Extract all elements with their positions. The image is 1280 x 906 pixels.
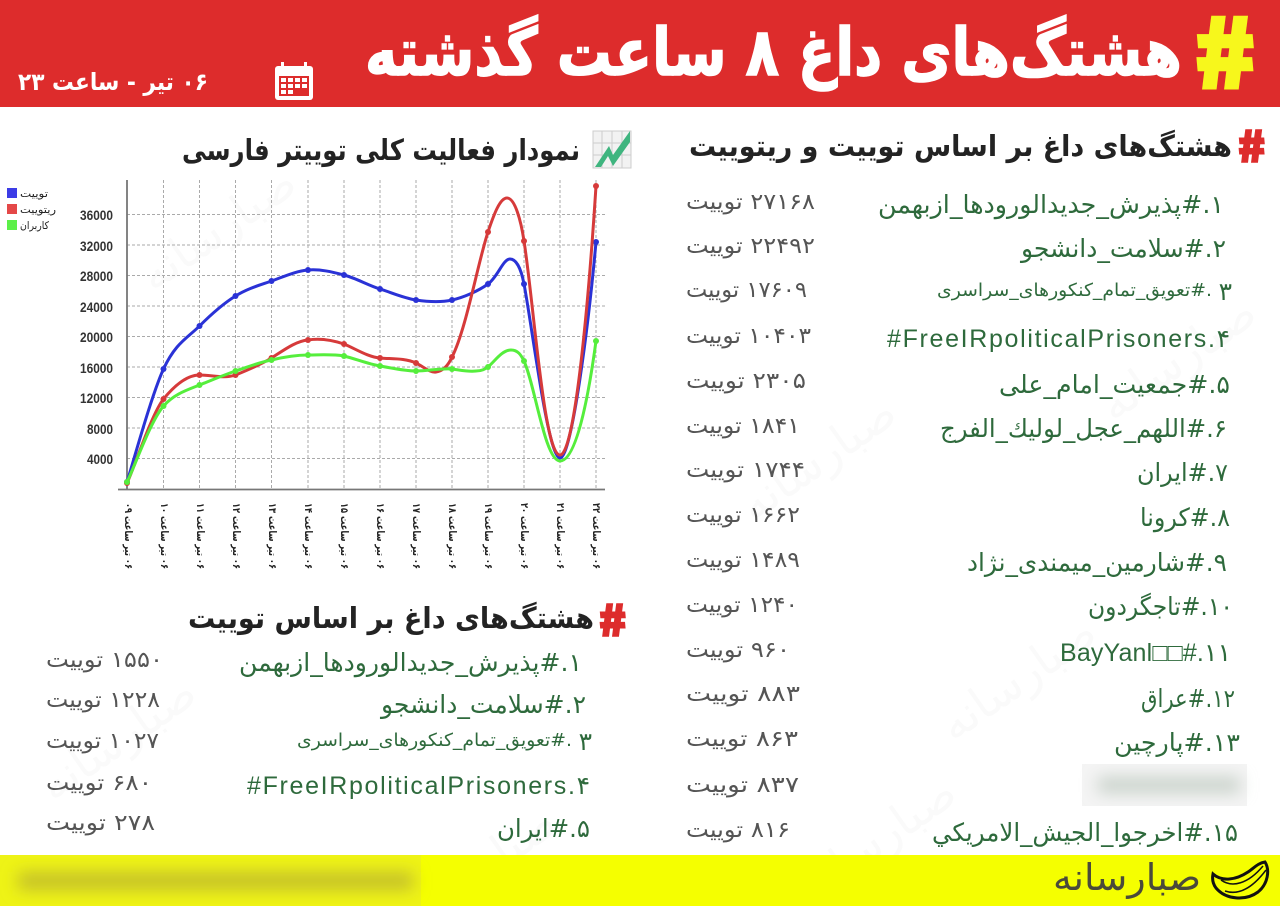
x axis labels: ۰۶ تیر ساعت ۱۷ — [410, 503, 422, 569]
heading: tweet and retweet: هشتگ‌های داغ بر اساس توییت و ریتوییت — [689, 129, 1232, 163]
y axis labels: 36000 — [80, 207, 113, 223]
row 11 hashtag: BayYanl□□#.۱۱ — [1060, 639, 1231, 667]
row 14 count: ۸۳۷ توییت — [686, 773, 799, 798]
row 4 count: ۶۸۰ توییت — [46, 771, 152, 796]
row 1 hashtag: ۱.#پذیرش_جدیدالورودها_ازبهمن — [239, 648, 582, 678]
legend: کاربران — [20, 220, 49, 232]
series: users (green) — [124, 338, 599, 485]
row 1 count: ۱۵۵۰ توییت — [46, 648, 163, 673]
y axis labels: 4000 — [87, 451, 113, 467]
y axis labels: 16000 — [80, 360, 113, 376]
icon: chart trend — [593, 131, 631, 168]
watermark background: صبارسانه — [29, 665, 206, 812]
x axis labels: ۰۶ تیر ساعت ۱۰ — [158, 503, 170, 569]
row 1 hashtag: ۱.#پذیرش_جدیدالورودها_ازبهمن — [878, 190, 1224, 220]
y axis labels: 24000 — [80, 299, 113, 315]
header banner — [0, 0, 1280, 107]
heading: activity chart: نمودار فعالیت کلی توییتر فارسی — [182, 133, 580, 167]
date and time: ۰۶ تیر - ساعت ۲۳ — [18, 68, 208, 96]
x axis labels: ۰۶ تیر ساعت ۲۰ — [518, 503, 530, 569]
watermark background: صبارسانه — [729, 385, 906, 532]
row 14 blurred hashtag — [1082, 764, 1247, 806]
row 1 count: ۲۷۱۶۸ توییت — [686, 190, 815, 215]
row 12 hashtag: ۱۲.#عراق — [1141, 684, 1235, 713]
y axis labels: 12000 — [80, 390, 113, 406]
row 3 count: ۱۷۶۰۹ توییت — [686, 278, 807, 303]
watermark background: صبارسانه — [929, 605, 1106, 752]
row 13 count: ۸۶۳ توییت — [686, 727, 798, 752]
legend — [7, 188, 56, 232]
row 2 count: ۱۲۲۸ توییت — [46, 688, 160, 713]
line chart — [7, 180, 605, 569]
watermark background: صبارسانه — [1089, 285, 1266, 432]
x axis labels: ۰۶ تیر ساعت ۱۸ — [446, 503, 458, 569]
row 2 hashtag: ۲.#سلامت_دانشجو — [1019, 234, 1226, 263]
panel: tweets ranking — [46, 596, 627, 843]
brand name: صبارسانه — [1053, 856, 1201, 899]
row 6 count: ۱۸۴۱ توییت — [686, 414, 800, 439]
x axis labels — [122, 503, 602, 569]
row 2 hashtag: ۲.#سلامت_دانشجو — [379, 690, 586, 719]
row 8 count: ۱۶۶۲ توییت — [686, 503, 800, 528]
row 3 count: ۱۰۲۷ توییت — [46, 729, 159, 754]
row 9 hashtag: ۹.#شارمین_میمندی_نژاد — [967, 548, 1227, 577]
row 5 count: ۲۳۰۵ توییت — [686, 369, 806, 394]
row 4 hashtag: #FreeIRpoliticalPrisoners.۴ — [887, 325, 1230, 353]
row 3 hashtag: ۳ — [579, 727, 592, 756]
icon: calendar — [275, 62, 313, 100]
x axis labels: ۰۶ تیر ساعت ۱۱ — [194, 503, 206, 569]
row 6 hashtag: ۶.#اللهم_عجل_لولیك_الفرج — [940, 414, 1227, 444]
y axis labels: 20000 — [80, 329, 113, 345]
x axis labels: ۰۶ تیر ساعت ۱۹ — [482, 503, 494, 569]
row 11 count: ۹۶۰ توییت — [686, 638, 790, 663]
row 3 hashtag: .#تعویق_تمام_کنکورهای_سراسری — [937, 280, 1212, 301]
y axis labels: 8000 — [87, 421, 113, 437]
row 4 hashtag: #FreeIRpoliticalPrisoners.۴ — [247, 772, 590, 800]
legend: توییت — [20, 188, 48, 200]
row 13 hashtag: ۱۳.#پارچین — [1114, 728, 1240, 757]
x axis labels: ۰۶ تیر ساعت ۲۲ — [590, 503, 602, 569]
row 3 hashtag: .#تعویق_تمام_کنکورهای_سراسری — [297, 730, 572, 751]
series: retweets (red) — [124, 183, 599, 486]
y axis labels: 32000 — [80, 238, 113, 254]
row 7 hashtag: ۷.#ایران — [1137, 458, 1228, 487]
watermark background: صبارسانه — [129, 155, 306, 302]
x axis labels: ۰۶ تیر ساعت ۰۹ — [122, 503, 134, 569]
x axis labels: ۰۶ تیر ساعت ۱۴ — [302, 503, 314, 569]
row 7 count: ۱۷۴۴ توییت — [686, 458, 805, 483]
heading icon: hash: # — [598, 596, 627, 645]
row 2 count: ۲۲۴۹۲ توییت — [686, 234, 815, 259]
series: tweets (blue) — [124, 239, 599, 485]
row 15 hashtag: ۱۵.#اخرجوا_الجیش_الامریكي — [932, 818, 1238, 847]
row 10 count: ۱۲۴۰ توییت — [686, 593, 798, 618]
row 5 hashtag: ۵.#ایران — [497, 814, 590, 843]
row 5 hashtag: ۵.#جمعیت_امام_علی — [999, 370, 1230, 399]
header hash icon: # — [1193, 0, 1257, 107]
panel: tweets and retweets ranking — [686, 122, 1266, 847]
row 3 hashtag — [937, 277, 1232, 306]
row 3 hashtag: ۳ — [1219, 277, 1232, 306]
x axis labels: ۰۶ تیر ساعت ۱۵ — [338, 503, 350, 569]
row 4 count: ۱۰۴۰۳ توییت — [686, 324, 811, 349]
footer bar — [0, 855, 1280, 906]
row 5 count: ۲۷۸ توییت — [46, 811, 155, 836]
row 10 hashtag: ۱۰.#تاجگردون — [1088, 592, 1233, 622]
legend: ریتوییت — [20, 204, 56, 216]
row 8 hashtag: ۸.#کرونا — [1140, 503, 1230, 533]
x axis labels: ۰۶ تیر ساعت ۱۶ — [374, 503, 386, 569]
heading: tweet: هشتگ‌های داغ بر اساس توییت — [188, 601, 594, 635]
y axis labels — [80, 207, 113, 467]
blurred footer text — [0, 855, 421, 906]
x axis labels: ۰۶ تیر ساعت ۱۲ — [230, 503, 242, 569]
x axis labels: ۰۶ تیر ساعت ۱۳ — [266, 503, 278, 569]
row 3 hashtag — [297, 727, 592, 756]
main title: هشتگ‌های داغ ۸ ساعت گذشته — [365, 14, 1182, 91]
row 15 count: ۸۱۶ توییت — [686, 818, 790, 843]
heading icon: hash: # — [1237, 122, 1266, 171]
row 9 count: ۱۴۸۹ توییت — [686, 548, 800, 573]
icon: banana logo — [1213, 862, 1268, 898]
row 12 count: ۸۸۳ توییت — [686, 682, 800, 707]
x axis labels: ۰۶ تیر ساعت ۲۱ — [554, 503, 566, 569]
y axis labels: 28000 — [80, 268, 113, 284]
